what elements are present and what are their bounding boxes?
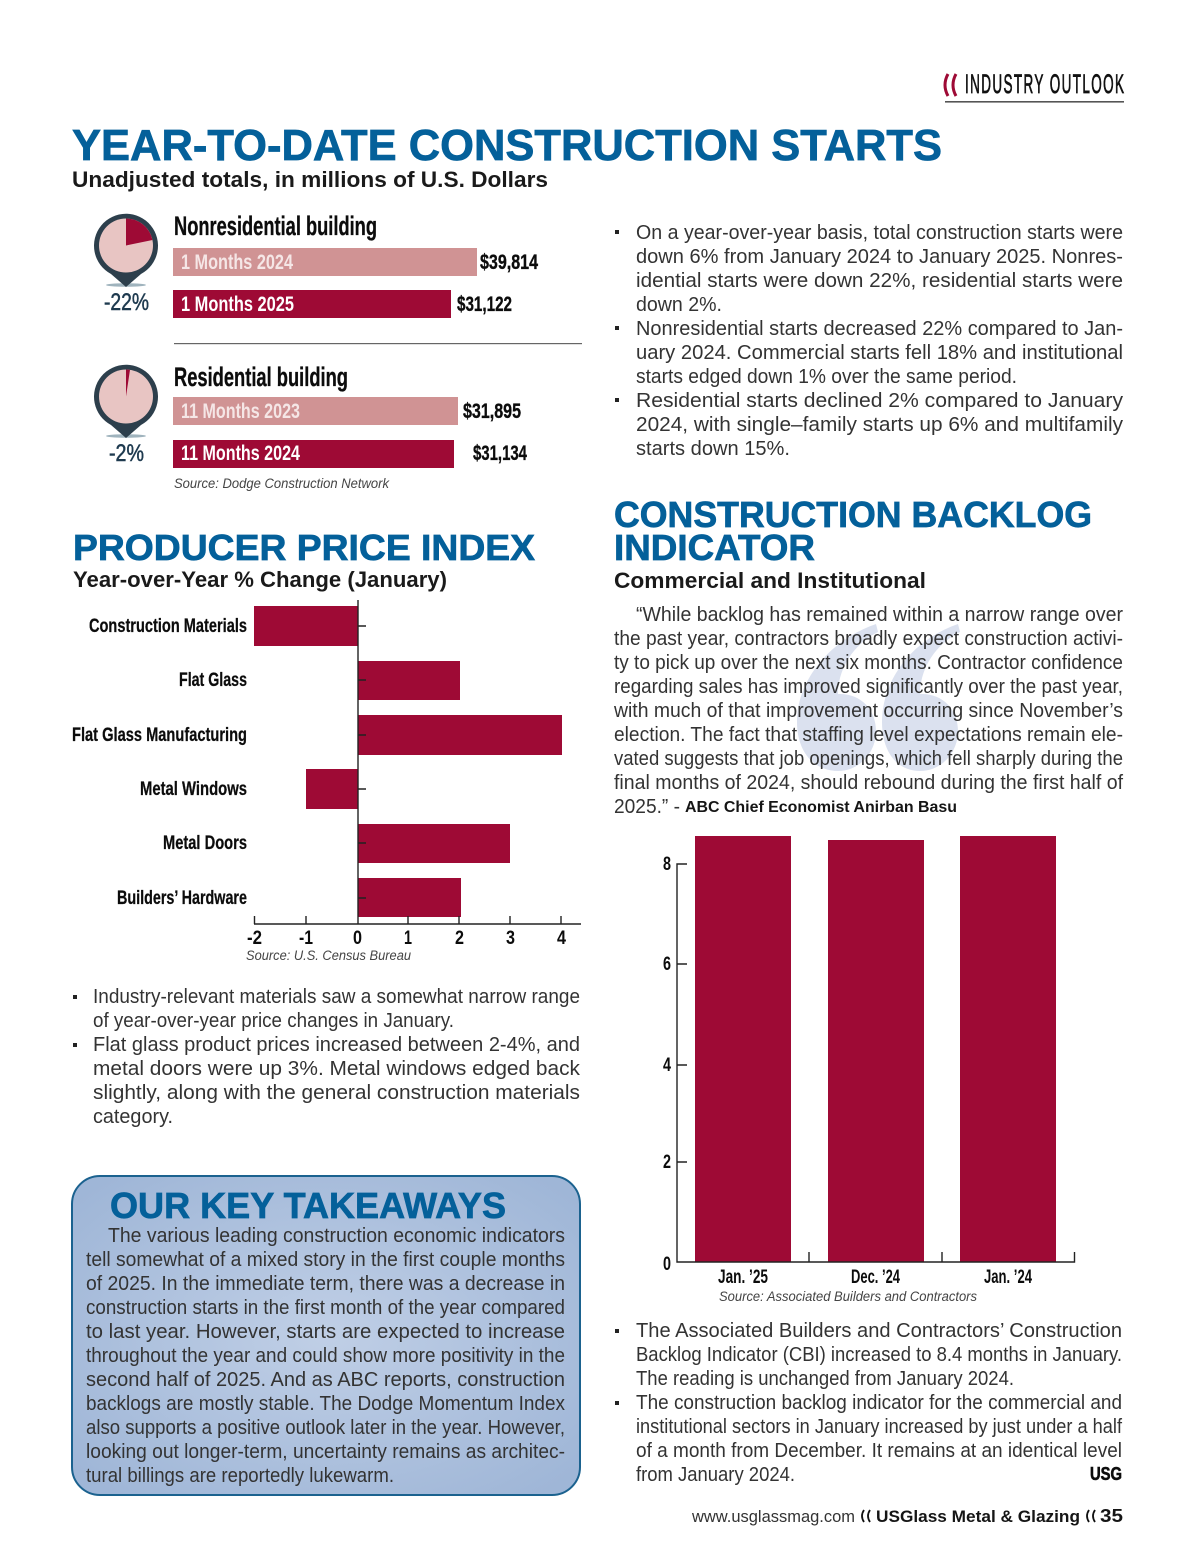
text block: price index bullets [73, 986, 581, 1128]
text block: price index bullets: slightly, along with the general construction materials [93, 1082, 580, 1104]
bars [695, 836, 1056, 1262]
title: YEAR-TO-DATE CONSTRUCTION STARTS [72, 121, 942, 170]
heading: construction backlog indicator [614, 494, 1092, 568]
panel: nonresidential building [94, 211, 538, 318]
heading: construction backlog indicator: CONSTRUCTION BACKLOG [614, 494, 1092, 535]
source note: Source: Associated Builders and Contractors [719, 1289, 977, 1304]
text block: backlog bullets [615, 1320, 1122, 1486]
category labels: Metal Doors [163, 833, 247, 854]
axis labels: 4 [557, 928, 566, 949]
text block: starts bullets: starts edged down 1% over the same period. [636, 366, 1017, 388]
axis labels: -2 [247, 928, 262, 949]
text block: economist quote: vated suggests that job openings, which fell sharply during the [614, 748, 1123, 770]
panel text: construction starts in the first month of the year compared [86, 1297, 565, 1319]
panel text: backlogs are mostly stable. The Dodge Momentum Index [86, 1393, 565, 1415]
text block: economist quote [613, 604, 1123, 818]
panel text: looking out longer-term, uncertainty remains as architec- [86, 1441, 565, 1463]
text block: starts bullets: uary 2024. Commercial starts fell 18% and institutional [636, 342, 1123, 364]
percent change -2%: -2% [109, 440, 144, 467]
text block: starts bullets: starts down 15%. [636, 438, 790, 460]
header rule [945, 101, 1124, 103]
text block: price index bullets: Industry-relevant materials saw a somewhat narrow range [93, 986, 580, 1008]
category labels: Flat Glass [179, 670, 247, 691]
bar: 1 months 2024 [173, 248, 538, 276]
heading: Nonresidential building [174, 211, 377, 241]
subheading: commercial and institutional: Commercial and Institutional [614, 568, 926, 593]
page number: 35 [1100, 1506, 1123, 1526]
bar: 11 months 2024: 11 Months 2024 [181, 442, 300, 465]
heading: producer price index: PRODUCER PRICE INDEX [73, 527, 535, 568]
panel text [86, 1225, 565, 1487]
icon: large quotation mark [797, 624, 960, 771]
panel text: throughout the year and could show more positivity in the [86, 1345, 565, 1367]
text block: economist quote: the past year, contractors broadly expect construction activi- [614, 628, 1123, 650]
text block: price index bullets: metal doors were up 3%. Metal windows edged back [93, 1058, 581, 1080]
header label: INDUSTRY OUTLOOK [965, 69, 1124, 99]
text block: starts bullets [615, 222, 1123, 460]
panel text: tural billings are reportedly lukewarm. [86, 1465, 394, 1487]
x axis labels: Jan. ’25 [718, 1267, 768, 1288]
y axis labels: 4 [663, 1055, 671, 1076]
axis labels: -1 [299, 928, 313, 949]
panel text: also supports a positive outlook later in the year. However, [86, 1417, 565, 1439]
y axis labels [663, 854, 671, 1275]
text block: backlog bullets: Backlog Indicator (CBI) increased to 8.4 months in January. [636, 1344, 1122, 1366]
bar: 1 months 2025 [173, 290, 512, 318]
source note: Source: U.S. Census Bureau [246, 948, 411, 963]
text block: backlog bullets: The Associated Builders and Contractors’ Construction [636, 1320, 1122, 1342]
footer [691, 1506, 1123, 1526]
panel: our key takeaways [72, 1176, 580, 1495]
bar: 11 months 2023: 11 Months 2023 [181, 400, 300, 423]
x axis labels: Jan. ’24 [984, 1267, 1032, 1288]
icon: double chevron [945, 74, 956, 96]
text block: economist quote: regarding sales has improved significantly over the past year, [614, 676, 1123, 698]
bar: 1 months 2025: 1 Months 2025 [181, 293, 294, 316]
text block: price index bullets: Flat glass product prices increased between 2-4%, and [93, 1034, 580, 1056]
axis labels: 0 [353, 928, 362, 949]
y axis labels: 2 [663, 1152, 671, 1173]
source note: Source: Dodge Construction Network [174, 476, 390, 491]
bar chart: construction backlog [663, 836, 1074, 1304]
text block: economist quote: “While backlog has remained within a narrow range over [636, 604, 1123, 626]
axis labels [247, 928, 566, 949]
text block: economist quote: 2025.” - [614, 796, 680, 818]
y axis labels: 0 [663, 1254, 671, 1275]
panel text: of 2025. In the immediate term, there was a decrease in [86, 1273, 565, 1295]
x axis labels: Dec. ’24 [851, 1267, 900, 1288]
text block: backlog bullets: USG [1090, 1464, 1122, 1484]
text block: economist quote: final months of 2024, should rebound during the first half of [614, 772, 1123, 794]
text block: starts bullets: 2024, with single–family starts up 6% and multifamily [636, 414, 1123, 436]
text block: starts bullets: down 2%. [636, 294, 722, 316]
bar: 1 months 2024: 1 Months 2024 [181, 251, 293, 274]
text block: backlog bullets: The construction backlog indicator for the commercial and [636, 1392, 1122, 1414]
panel text: tell somewhat of a mixed story in the first couple months [86, 1249, 565, 1271]
panel text: second half of 2025. And as ABC reports, construction [86, 1369, 565, 1391]
icon: double chevron [1087, 1510, 1095, 1522]
text block: price index bullets: category. [93, 1106, 173, 1128]
text block: economist quote: election. The fact that staffing level expectations remain ele- [614, 724, 1123, 746]
panel: residential building [94, 362, 527, 491]
category labels [72, 616, 247, 909]
category labels: Flat Glass Manufacturing [72, 725, 247, 746]
text block: economist quote: ty to pick up over the next six months. Contractor confidence [614, 652, 1123, 674]
bar: 11 months 2023 [173, 397, 521, 425]
text block: economist quote: with much of that improvement occurring since November’s [613, 700, 1123, 722]
text block: price index bullets: of year-over-year price changes in January. [93, 1010, 454, 1032]
icon: gauge -2% [94, 365, 158, 438]
text block: starts bullets: down 6% from January 2024 to January 2025. Nonres- [636, 246, 1123, 268]
text block: starts bullets: Residential starts declined 2% compared to January [636, 390, 1123, 412]
panel heading: OUR KEY TAKEAWAYS [110, 1185, 506, 1226]
y axis labels: 8 [663, 854, 671, 875]
section header: industry outlook [945, 69, 1124, 103]
y axis labels: 6 [663, 954, 671, 975]
bar: 11 months 2023: $31,895 [463, 400, 521, 423]
bar: 1 months 2024: $39,814 [480, 251, 538, 274]
bar: 11 months 2024 [173, 440, 527, 468]
subtitle: Unadjusted totals, in millions of U.S. Dollars [72, 167, 548, 192]
bar chart: producer price index [72, 600, 581, 963]
axis labels: 3 [506, 928, 515, 949]
text block: starts bullets: idential starts were down 22%, residential starts were [636, 270, 1123, 292]
bar: 1 months 2025: $31,122 [457, 293, 512, 316]
panel text: to last year. However, starts are expected to increase [86, 1321, 565, 1343]
text block: starts bullets: On a year-over-year basis, total construction starts were [636, 222, 1123, 244]
text block: economist quote: ABC Chief Economist Anirban Basu [685, 799, 957, 816]
text block: backlog bullets: from January 2024. [636, 1464, 795, 1486]
website: www.usglassmag.com [691, 1507, 855, 1526]
axis labels: 1 [404, 928, 412, 949]
icon: gauge -22% [94, 214, 158, 287]
panel text: The various leading construction economic indicators [108, 1225, 565, 1247]
category labels: Builders’ Hardware [117, 888, 247, 909]
category labels: Metal Windows [140, 779, 247, 800]
magazine name: USGlass Metal & Glazing [876, 1507, 1080, 1526]
subheading: year-over-year change: Year-over-Year % Change (January) [73, 567, 447, 592]
heading: Residential building [174, 362, 348, 392]
text block: backlog bullets: institutional sectors in January increased by just under a half [636, 1416, 1122, 1438]
x axis labels [718, 1267, 1032, 1288]
icon: double chevron [862, 1510, 870, 1522]
percent change -22%: -22% [104, 289, 149, 316]
bar: 11 months 2024: $31,134 [473, 442, 527, 465]
text block: starts bullets: Nonresidential starts decreased 22% compared to Jan- [636, 318, 1123, 340]
bars [254, 606, 562, 917]
axis labels: 2 [455, 928, 464, 949]
category labels: Construction Materials [89, 616, 247, 637]
text block: backlog bullets: The reading is unchanged from January 2024. [636, 1368, 1014, 1390]
text block: backlog bullets: of a month from December. It remains at an identical level [636, 1440, 1122, 1462]
heading: construction backlog indicator: INDICATOR [614, 527, 815, 568]
